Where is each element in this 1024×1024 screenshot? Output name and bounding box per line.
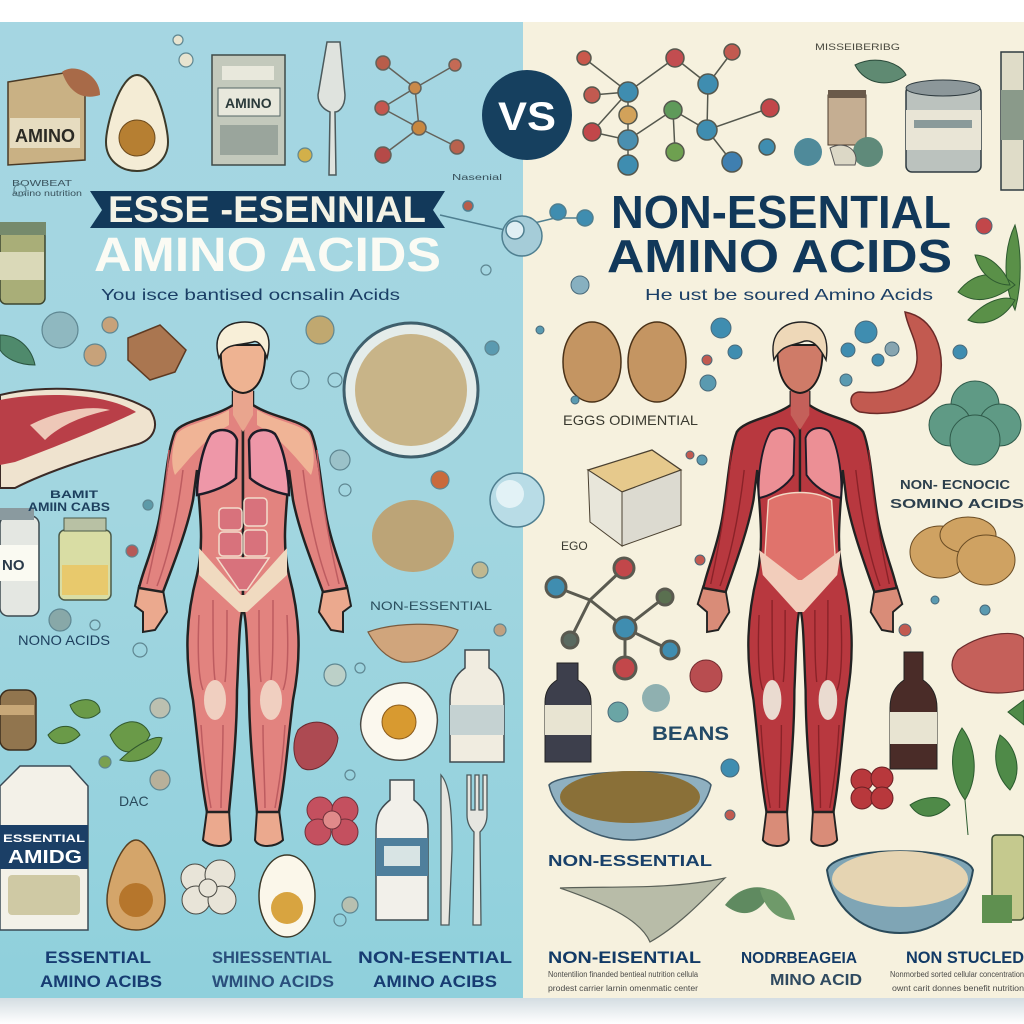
label: bottom mid amino acids <box>212 948 334 991</box>
icon: red flower right <box>851 767 893 809</box>
muscles <box>703 392 897 812</box>
icon: dark bottle right <box>890 652 937 769</box>
lungs <box>759 428 841 498</box>
subtitle: You isce bantised ocnsalin Acids <box>101 287 400 304</box>
icon: tofu block <box>588 450 681 546</box>
label: bottom nodrased amino acid: MINO ACID <box>770 972 862 989</box>
icon: molecule lower <box>546 558 679 679</box>
icon: milk carton <box>0 766 88 930</box>
shoulders <box>172 410 314 475</box>
label: bottom nodrased amino acid: NODRBEAGEIA <box>741 950 857 967</box>
icon: food jar top <box>794 90 883 167</box>
icon: molecule top <box>375 56 464 163</box>
label: bottom non-essential right: NON-EISENTIAL <box>548 948 701 967</box>
hip tendon <box>199 548 287 612</box>
icon: fried egg <box>361 683 437 760</box>
icon: product box <box>212 55 285 165</box>
icon: package right edge <box>1001 52 1024 190</box>
icon: jars <box>0 508 111 616</box>
icon: avocado top <box>106 75 168 171</box>
icon: brown eggs <box>563 322 686 402</box>
icon: shrimp <box>851 312 941 413</box>
label: amino acids small <box>28 489 110 514</box>
icon: green leaves <box>48 700 162 761</box>
label: nono acids: NONO ACIDS <box>18 632 110 648</box>
label: egg: EGO <box>561 539 588 553</box>
icon: rice bowl <box>827 851 973 933</box>
icon: package top left <box>8 69 100 165</box>
title: essential amino acids: AMINO ACIDS <box>94 229 441 282</box>
hands and feet <box>135 586 351 846</box>
label: bottom non-essential right: Nontentilion finanded bentieal nutrition cellula <box>548 970 699 979</box>
label: bottom non-essential right <box>548 948 701 993</box>
label: bottom mid amino acids: WMINO ACIDS <box>212 972 334 991</box>
label: non-economic amino acids: NON- ECNOCIC <box>900 477 1011 492</box>
icon: jars: NO <box>2 557 25 574</box>
panel: non-essential amino acids <box>523 22 1024 998</box>
subtitle: He ust be soured Amino Acids <box>645 287 933 304</box>
text: small top caption: MISSEIBERIBG <box>815 42 900 52</box>
label: bottom non-essential <box>358 948 512 991</box>
decorative small molecules left <box>14 35 506 926</box>
icon: bubble with molecules center <box>440 201 593 256</box>
label: amino acids small: BAMIT <box>50 489 98 501</box>
label: bottom non right <box>890 948 1024 993</box>
pelvis tendon <box>759 550 841 612</box>
title: non-essential amino acids: NON-ESENTIAL <box>611 186 951 238</box>
icon: leaf top <box>855 60 906 83</box>
caption: small left text: amino nutrition <box>12 189 82 198</box>
icon: quinoa bowl <box>344 323 478 457</box>
label: non-essential: NON-ESSENTIAL <box>370 599 492 613</box>
icon: seed pile <box>372 500 454 572</box>
label: bottom non-essential: AMINO ACIBS <box>373 972 497 991</box>
icon: nut stack <box>0 690 36 750</box>
caption: small left text: BOWBEAT <box>12 179 72 188</box>
decorative molecules right <box>536 218 992 820</box>
muscle fibres <box>147 450 339 808</box>
icon: small bottle bottom <box>376 780 428 920</box>
label: bottom essential amino acids: AMINO ACIBS <box>40 972 162 991</box>
panel: essential amino acids <box>0 22 523 998</box>
label: bottom non-essential right: prodest carrier larnin omenmatic center <box>548 984 698 993</box>
icon: jar right edge <box>982 835 1024 923</box>
label: dac: DAC <box>119 793 149 809</box>
abs <box>217 498 269 590</box>
label: bottom non right: ownt carit donnes benefit nutrition <box>892 984 1024 993</box>
icon: can <box>906 80 981 172</box>
label: bottom essential amino acids: ESSENTIAL <box>45 948 151 967</box>
icon: walnut <box>128 325 186 380</box>
badge: vs: VS <box>498 95 556 139</box>
icon: knife and fork <box>441 775 487 925</box>
knee <box>763 680 837 720</box>
icon: product box: AMINO <box>225 95 272 111</box>
icon: leaf fish shape <box>560 878 795 942</box>
icon: red flower <box>305 797 358 845</box>
icon: avocado bottom <box>107 840 165 930</box>
label: bottom non-essential: NON-ESENTIAL <box>358 948 512 967</box>
label: amino acids small: AMIIN CABS <box>28 500 110 514</box>
figure: non-essential body <box>698 322 902 846</box>
icon: liver <box>952 633 1024 693</box>
knee <box>204 680 282 720</box>
label: bottom essential amino acids <box>40 948 162 991</box>
icon: leaf left <box>0 335 35 365</box>
icon: boiled egg <box>259 855 315 937</box>
label: non-economic amino acids <box>890 477 1024 511</box>
caption: small left text: Nasenial <box>452 173 502 182</box>
muscle fibres <box>711 450 889 808</box>
icon: fork top <box>318 42 345 175</box>
muscles <box>139 392 347 812</box>
icon: milk carton: AMIDG <box>8 847 82 867</box>
page shadow <box>0 998 1024 1024</box>
lungs <box>197 430 289 495</box>
icon: dark bottle left <box>545 663 591 762</box>
icon: bubble on panel boundary <box>490 473 544 527</box>
label: bottom mid amino acids: SHIESSENTIAL <box>212 948 332 967</box>
icon: green plant <box>910 700 1024 835</box>
icon: red organ <box>294 722 338 770</box>
icon: lentil bowl <box>549 771 711 840</box>
abs <box>765 492 835 590</box>
figure: essential body <box>135 322 351 846</box>
badge: vs <box>482 70 572 160</box>
label: beans: BEANS <box>652 724 729 745</box>
caption: small left text <box>12 173 502 198</box>
label: eggs: EGGS ODIMENTIAL <box>563 412 698 428</box>
label: non-economic amino acids: SOMINO ACIDS <box>890 496 1024 511</box>
icon: berry <box>690 660 722 692</box>
icon: almond <box>368 624 458 662</box>
label: non-essential mid: NON-ESSENTIAL <box>548 853 712 870</box>
icon: herbs <box>958 225 1020 323</box>
icon: molecule network top <box>577 44 779 175</box>
head <box>217 322 269 432</box>
head <box>773 322 827 430</box>
icon: broccoli <box>929 381 1021 465</box>
icon: milk bottle <box>450 650 504 762</box>
icon: milk carton: ESSENTIAL <box>3 833 85 845</box>
title: non-essential amino acids <box>607 186 952 282</box>
title: non-essential amino acids: AMINO ACIDS <box>607 230 952 282</box>
label: bottom nodrased amino acid <box>741 950 862 989</box>
icon: potatoes <box>910 517 1015 585</box>
icon: white flower <box>181 860 236 914</box>
icon: blue grain cluster <box>642 684 670 712</box>
icon: package top left: AMINO <box>15 126 75 146</box>
title: essential amino acids: ESSE -ESENNIAL <box>108 189 426 230</box>
hands and feet <box>698 586 902 846</box>
title: essential amino acids <box>90 189 445 282</box>
icon: meat steak <box>0 389 155 488</box>
icon: jar left <box>0 222 46 304</box>
